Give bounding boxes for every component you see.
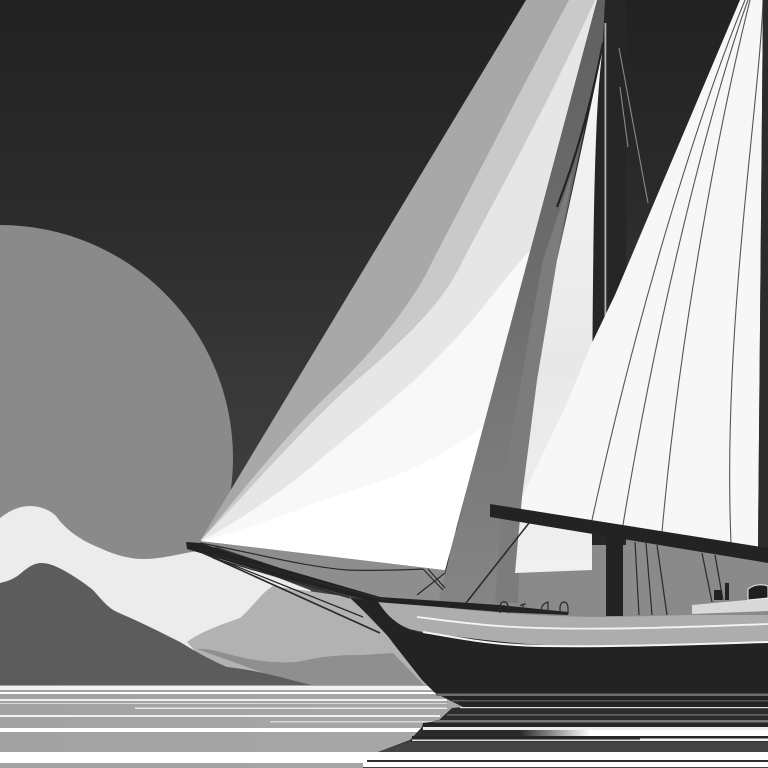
boom (490, 504, 768, 563)
foremast dark column (592, 0, 626, 545)
deck box (714, 583, 729, 600)
rope on grey sail (557, 43, 603, 207)
dark hull body (350, 598, 768, 707)
deck rigging lines (635, 542, 723, 615)
light water surface (0, 685, 768, 768)
inner white panel (201, 427, 483, 570)
second panel (201, 0, 597, 570)
right edge dark stay (758, 0, 768, 552)
mid-grey mountain (187, 586, 440, 690)
dark hull reflection (378, 707, 768, 752)
upper hull band (377, 600, 768, 646)
cabin roof (692, 598, 768, 614)
cabin window (748, 585, 768, 600)
water (0, 685, 768, 768)
hull (350, 598, 768, 707)
near-white panel (201, 250, 530, 570)
bowsprit (186, 542, 568, 615)
reflection lines on hull base (436, 694, 768, 696)
mid-ship rigging (200, 523, 529, 603)
far low mountain (197, 649, 425, 686)
water highlights (0, 686, 768, 767)
dark foreground mountain (0, 563, 315, 686)
main jib sail (200, 0, 597, 570)
sky rigging lines (619, 48, 648, 203)
reflection stripes (363, 707, 768, 768)
mast highlight (604, 23, 606, 323)
main sail (522, 0, 763, 547)
sun (0, 225, 233, 691)
battens (592, 0, 763, 543)
deck cleats (500, 602, 568, 614)
grey panel (438, 0, 605, 603)
bow rigging (203, 553, 387, 633)
background behind deck (380, 530, 768, 630)
pale cloud-topped ridge (0, 506, 400, 690)
grey sail stripe (438, 0, 605, 603)
outer grey panel (200, 0, 597, 570)
third panel (201, 0, 597, 570)
white sheer line (417, 617, 768, 629)
white waterline (423, 632, 768, 646)
staysail (515, 53, 602, 573)
mountains (0, 506, 440, 690)
grey area under jib foot (200, 541, 445, 603)
lighter grey panel (495, 170, 573, 603)
sail cloth (522, 0, 763, 547)
main mast (606, 530, 623, 616)
cabin (692, 583, 768, 614)
second reflection line (452, 700, 768, 702)
